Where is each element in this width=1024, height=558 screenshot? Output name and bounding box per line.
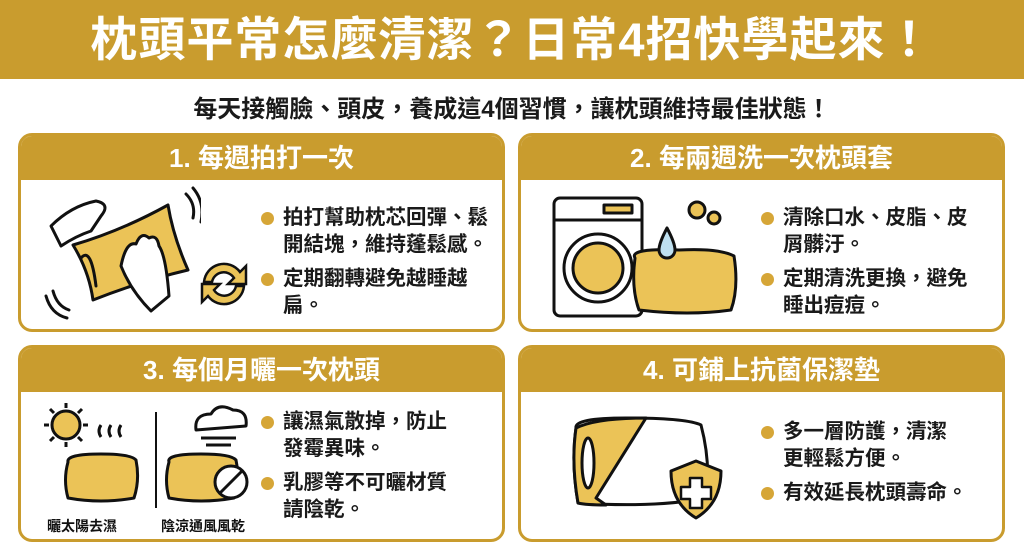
icon: washing machine and pillow [552, 196, 738, 318]
header 4: 4. 可鋪上抗菌保潔墊 [643, 355, 880, 385]
bullets 1 [261, 206, 488, 317]
bullets 3: 讓濕氣散掉，防止 [283, 410, 447, 433]
bullets 1: 拍打幫助枕芯回彈、鬆 [283, 206, 488, 229]
header 3 [21, 348, 502, 392]
bullets 3 [261, 410, 447, 521]
header 2: 2. 每兩週洗一次枕頭套 [630, 143, 893, 173]
title [0, 0, 1024, 79]
bullets 1: 定期翻轉避免越睡越 [283, 267, 468, 290]
bullets 1: 扁。 [283, 294, 324, 317]
bullets 2: 睡出痘痘。 [783, 294, 886, 317]
panel: 1 weekly patting [18, 133, 505, 332]
bullets 2: 屑髒汙。 [783, 233, 865, 256]
header 1: 1. 每週拍打一次 [169, 143, 354, 173]
bullets 2 [761, 206, 968, 317]
icon: pillow with hands [44, 186, 201, 320]
header 1 [21, 136, 502, 180]
bullets 3: 發霉異味。 [283, 437, 386, 460]
icon: pillow with shield [572, 416, 722, 520]
panel: 4 antibacterial pad [518, 345, 1005, 542]
header 3: 3. 每個月曬一次枕頭 [143, 355, 380, 385]
bullets 3: 請陰乾。 [283, 498, 365, 521]
bullets 4 [761, 420, 968, 504]
bullets 4: 多一層防護，清潔 [783, 420, 947, 443]
bullets 4: 有效延長枕頭壽命。 [783, 481, 968, 504]
bullets 2: 定期清洗更換，避免 [783, 267, 968, 290]
subtitle: 每天接觸臉、頭皮，養成這4個習慣，讓枕頭維持最佳狀態！ [193, 96, 831, 123]
title: 枕頭平常怎麼清潔？日常4招快學起來！ [90, 13, 934, 66]
bullets 2: 清除口水、皮脂、皮 [783, 206, 968, 229]
bullets 1: 開結塊，維持蓬鬆感。 [283, 233, 488, 256]
label: sun dry: 曬太陽去濕 [47, 518, 117, 534]
header 2 [521, 136, 1002, 180]
bullets 4: 更輕鬆方便。 [783, 447, 906, 470]
panel: 2 wash cover [518, 133, 1005, 332]
header 4 [521, 348, 1002, 392]
icon: sun pillow and shade pillow [44, 403, 248, 508]
icon: refresh arrows [200, 262, 248, 306]
bullets 3: 乳膠等不可曬材質 [283, 471, 447, 494]
label: shade dry: 陰涼通風風乾 [161, 518, 245, 534]
panel: 3 sun monthly [18, 345, 505, 542]
